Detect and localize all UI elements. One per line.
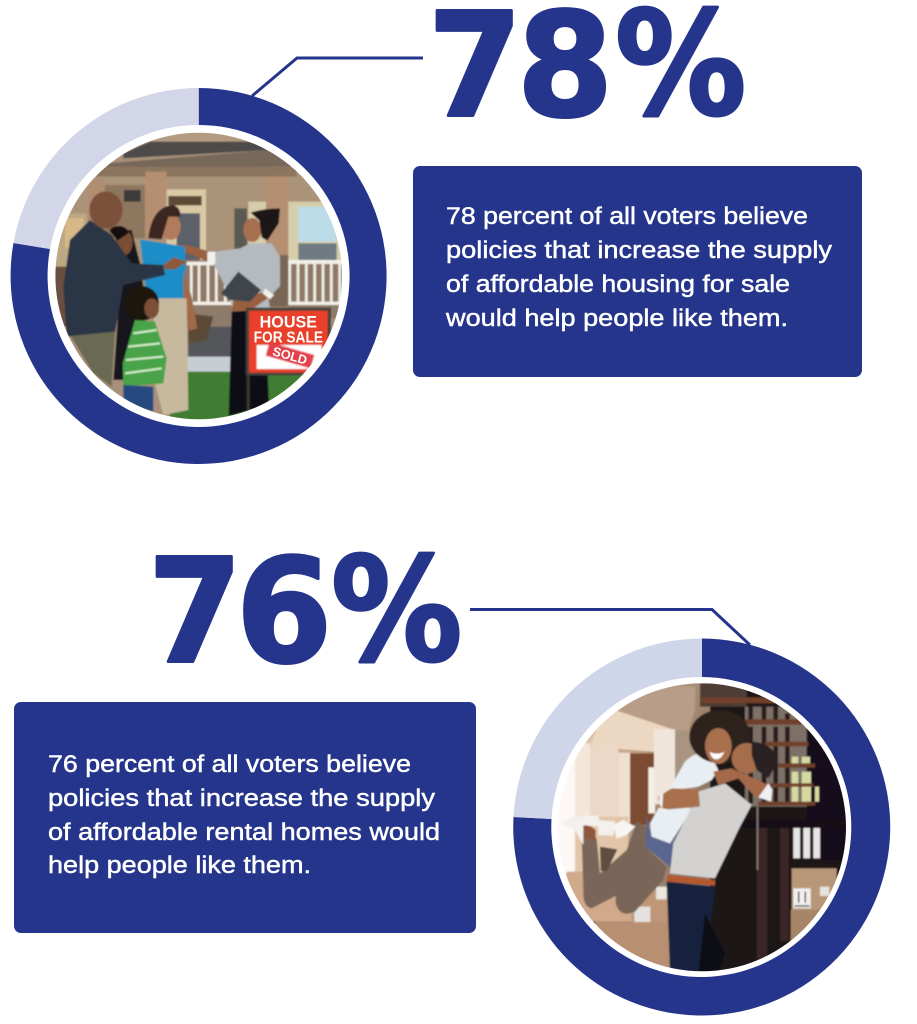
donut chart: 78 percent xyxy=(11,88,387,464)
stat: 78% xyxy=(428,0,746,150)
text panel: home sale policies: policies that increase the supply xyxy=(446,237,832,264)
girl xyxy=(113,230,143,380)
sign lettering: FOR SALE xyxy=(254,330,323,347)
woman's top xyxy=(645,815,682,868)
text panel: rental policies: help people like them. xyxy=(48,852,311,879)
stat: 76% xyxy=(148,527,462,696)
text panel: rental policies: of affordable rental homes would xyxy=(48,819,440,846)
stat: 76%: % xyxy=(331,527,462,695)
text panel: home sale policies xyxy=(413,166,862,377)
house for sale sign xyxy=(246,308,331,412)
woman's legs xyxy=(582,822,667,914)
text panel: home sale policies: of affordable housing for sale xyxy=(446,271,790,298)
photo: couple embracing among moving boxes xyxy=(558,683,846,972)
text panel: home sale policies: 78 percent of all voters believe xyxy=(446,203,808,230)
photo: family receiving keys outside a house for sale xyxy=(55,132,342,420)
boxes xyxy=(575,817,628,873)
sign lettering: HOUSE xyxy=(260,313,317,332)
sign lettering: SOLD xyxy=(271,344,309,368)
stat: 76%: 7 xyxy=(148,528,242,696)
man xyxy=(670,783,752,878)
connector line: 76% xyxy=(470,610,750,645)
boy in striped shirt xyxy=(123,320,167,387)
text panel: rental policies: policies that increase the supply xyxy=(48,785,435,812)
text panel: home sale policies: would help people like them. xyxy=(445,305,788,332)
stat: 76%: 6 xyxy=(236,529,332,696)
realtor xyxy=(229,305,269,416)
sign lettering xyxy=(254,316,322,364)
interior walls xyxy=(590,707,675,752)
connector line: 78% xyxy=(252,58,423,96)
text panel: rental policies: 76 percent of all voters believe xyxy=(48,751,411,778)
woman in blue top xyxy=(140,239,187,298)
text panel: rental policies xyxy=(14,702,476,933)
donut chart: 76 percent xyxy=(513,638,890,1015)
man xyxy=(63,220,165,337)
